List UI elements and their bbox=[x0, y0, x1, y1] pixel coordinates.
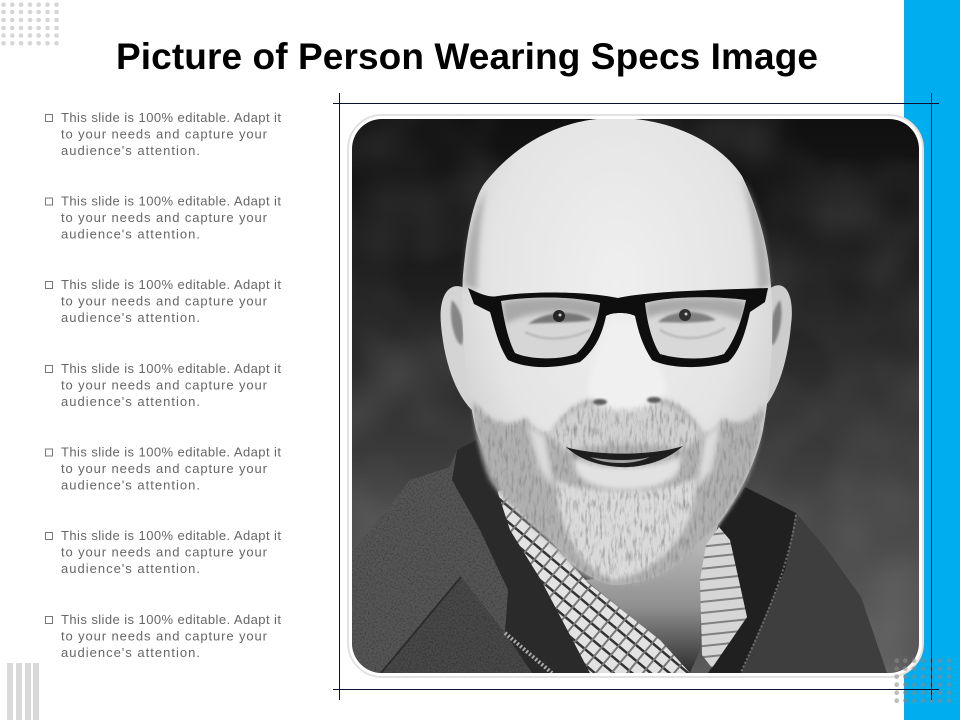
title: Picture of Person Wearing Specs Image bbox=[116, 36, 818, 77]
mouth bbox=[566, 446, 683, 467]
bullet 6: This slide is 100% editable. Adapt it bbox=[61, 528, 281, 543]
bullet 2: This slide is 100% editable. Adapt it bbox=[61, 194, 281, 209]
bullet 1 bbox=[46, 110, 281, 158]
photo frame bbox=[348, 115, 923, 677]
bullet 3: audience's attention. bbox=[61, 310, 200, 325]
bullet 3: to your needs and capture your bbox=[61, 294, 268, 309]
eyes bbox=[528, 309, 716, 324]
cheek skin beside moustache bbox=[527, 424, 721, 488]
bullet 6: audience's attention. bbox=[61, 561, 200, 576]
bullet 4: audience's attention. bbox=[61, 394, 200, 409]
chin skin bbox=[574, 456, 681, 490]
lenses bbox=[500, 296, 747, 363]
beard bbox=[473, 396, 763, 584]
bullet 4: This slide is 100% editable. Adapt it bbox=[61, 361, 281, 376]
bullet 5: audience's attention. bbox=[61, 478, 200, 493]
bullet 7: to your needs and capture your bbox=[61, 629, 268, 644]
bullet 7: audience's attention. bbox=[61, 645, 200, 660]
bullet 7: This slide is 100% editable. Adapt it bbox=[61, 612, 281, 627]
bullet 4: to your needs and capture your bbox=[61, 378, 268, 393]
bullet 3 bbox=[46, 277, 281, 325]
dot pattern: bottom right bbox=[894, 658, 951, 703]
dot pattern: top left bbox=[1, 2, 59, 46]
ears bbox=[441, 285, 792, 412]
bullet 2: audience's attention. bbox=[61, 227, 200, 242]
glasses frame bbox=[468, 288, 768, 367]
bullet 7 bbox=[46, 612, 281, 660]
bullet 5: to your needs and capture your bbox=[61, 461, 268, 476]
bullet 2 bbox=[46, 194, 281, 242]
bullet 1: audience's attention. bbox=[61, 143, 200, 158]
bullet 4 bbox=[46, 361, 281, 409]
bullet 1: to your needs and capture your bbox=[61, 126, 268, 142]
temple shading bbox=[464, 178, 770, 290]
jacket: right bbox=[708, 487, 887, 673]
shirt collar: left bbox=[497, 490, 690, 673]
blue side band bbox=[904, 0, 960, 720]
bullet 2: to your needs and capture your bbox=[61, 210, 268, 225]
bullet 3: This slide is 100% editable. Adapt it bbox=[61, 277, 281, 292]
stripes: bottom left bbox=[7, 663, 39, 720]
head bbox=[462, 118, 772, 585]
photo background bbox=[352, 119, 919, 673]
jacket: left bbox=[352, 440, 590, 673]
bullet 6: to your needs and capture your bbox=[61, 545, 268, 560]
bullet 5: This slide is 100% editable. Adapt it bbox=[61, 445, 281, 460]
bullet 1: This slide is 100% editable. Adapt it bbox=[61, 110, 281, 125]
shirt collar: right bbox=[700, 527, 747, 668]
nose bbox=[590, 385, 664, 413]
bullet 6 bbox=[46, 528, 281, 576]
crop lines bbox=[333, 93, 939, 700]
bullet list bbox=[46, 110, 281, 660]
bullet 5 bbox=[46, 445, 281, 493]
neck bbox=[585, 525, 718, 673]
portrait photo bbox=[352, 118, 919, 673]
